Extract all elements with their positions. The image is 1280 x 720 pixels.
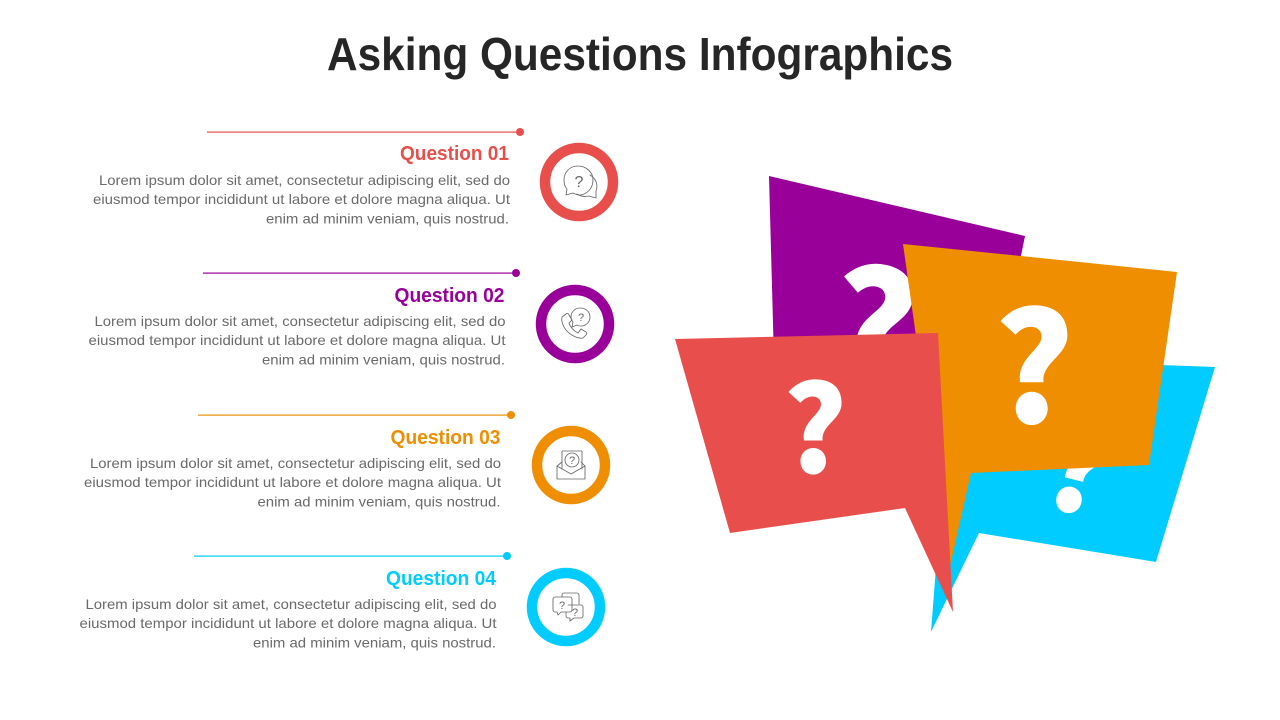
- body text 02: eiusmod tempor incididunt ut labore et dolore magna aliqua. Ut: [88, 332, 506, 348]
- body text 01: [93, 172, 510, 226]
- speech bubble: red: [675, 333, 953, 612]
- panel: question 01: [93, 128, 613, 226]
- body text 03: [84, 455, 501, 510]
- heading 02: Question 02: [394, 285, 504, 307]
- panel: question 03: [84, 411, 605, 510]
- connector line 04: [194, 552, 511, 560]
- speech bubble: orange: ?: [994, 249, 1074, 467]
- heading 01: Question 01: [400, 143, 509, 165]
- speech bubble: cyan: ?: [1028, 369, 1133, 553]
- body text 03: enim ad minim veniam, quis nostrud.: [258, 494, 500, 510]
- connector line 03: [198, 411, 515, 419]
- heading 04: Question 04: [386, 568, 497, 590]
- ring icon 01: chat question bubbles: [545, 148, 613, 216]
- body text 02: enim ad minim veniam, quis nostrud.: [262, 352, 505, 368]
- ring icon 04: multiple question bubbles: ?: [559, 600, 565, 612]
- panel: question 02: [88, 269, 609, 368]
- connector line 01: [207, 128, 524, 136]
- ring icon 02: phone with question: [541, 290, 609, 358]
- body text 04: Lorem ipsum dolor sit amet, consectetur adipiscing elit, sed do: [86, 596, 497, 612]
- ring icon 04: multiple question bubbles: [532, 573, 600, 641]
- heading 03: Question 03: [390, 427, 500, 449]
- body text 03: eiusmod tempor incididunt ut labore et dolore magna aliqua. Ut: [84, 474, 501, 490]
- body text 04: [80, 596, 497, 650]
- ring icon 01: chat question bubbles: ?: [575, 174, 584, 191]
- ring icon 03: envelope with question: ?: [569, 455, 575, 467]
- body text 01: Lorem ipsum dolor sit amet, consectetur adipiscing elit, sed do: [99, 172, 510, 188]
- speech bubble: red: ?: [783, 334, 847, 508]
- speech bubble: cyan: [931, 365, 1215, 632]
- body text 02: Lorem ipsum dolor sit amet, consectetur adipiscing elit, sed do: [94, 313, 506, 329]
- body text 01: enim ad minim veniam, quis nostrud.: [266, 210, 509, 226]
- speech bubble: purple: [769, 176, 1025, 440]
- ring icon 04: multiple question bubbles: ?: [572, 607, 578, 619]
- connector line 02: [203, 269, 520, 277]
- speech bubble: orange: [903, 244, 1177, 575]
- title: Asking Questions Infographics: [327, 28, 953, 80]
- body text 01: eiusmod tempor incididunt ut labore et dolore magna aliqua. Ut: [93, 191, 510, 207]
- ring icon 02: phone with question: ?: [578, 312, 584, 324]
- speech bubble: purple: ?: [818, 199, 931, 440]
- body text 04: eiusmod tempor incididunt ut labore et dolore magna aliqua. Ut: [80, 615, 497, 631]
- illustration: overlapping speech bubbles: [675, 176, 1215, 632]
- body text 04: enim ad minim veniam, quis nostrud.: [253, 634, 496, 650]
- body text 02: [88, 313, 506, 368]
- ring icon 03: envelope with question: [537, 431, 605, 499]
- body text 03: Lorem ipsum dolor sit amet, consectetur adipiscing elit, sed do: [90, 455, 501, 471]
- panel: question 04: [80, 552, 600, 650]
